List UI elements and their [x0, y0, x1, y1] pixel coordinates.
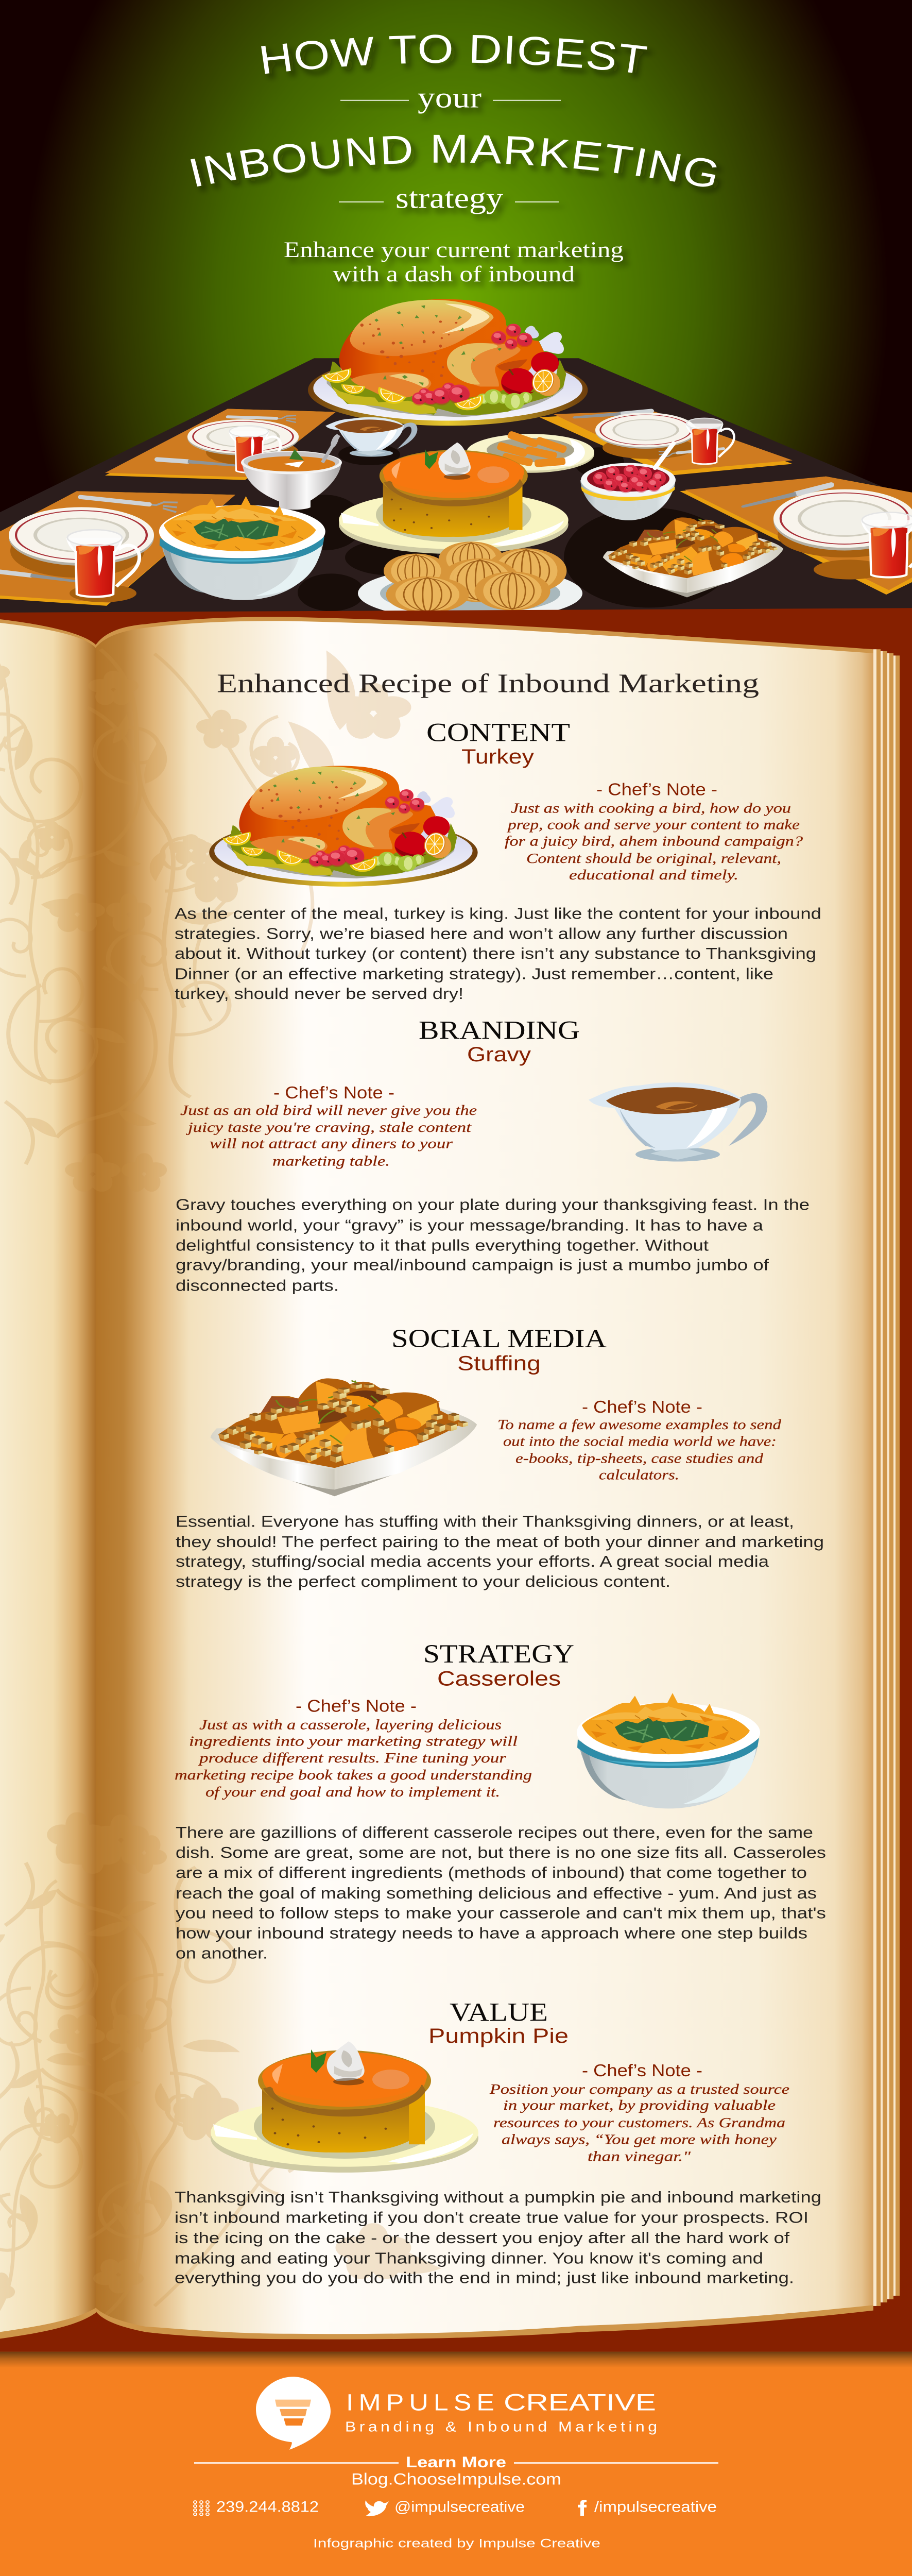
- icon: gravy boat: [589, 1082, 767, 1161]
- body text: you need to follow steps to make your casserole and can't mix them up, that's: [176, 1904, 826, 1922]
- chef's note: - Chef’s Note -: [596, 780, 717, 799]
- icon: turkey: [209, 766, 478, 887]
- heading: inbound marketing: INBOUND MARKETING: [191, 135, 722, 194]
- logo wordmark: [346, 2390, 656, 2416]
- chef's note: marketing recipe book takes a good understanding: [175, 1767, 532, 1783]
- body text: turkey, should never be served dry!: [175, 985, 463, 1002]
- placemat bottom left: [0, 491, 235, 606]
- table top: [0, 358, 912, 627]
- subtitle line 2: with a dash of inbound: [333, 262, 575, 286]
- subheading: Turkey: [461, 745, 534, 768]
- section: content: [175, 718, 821, 1002]
- chef's note: [175, 1697, 532, 1800]
- header background: [0, 0, 912, 627]
- chef's note: of your end goal and how to implement it.: [205, 1784, 500, 1800]
- cranberry cup: [580, 443, 676, 520]
- body text: Gravy touches everything on your plate during your thanksgiving feast. In the: [176, 1196, 810, 1213]
- body text: [176, 1823, 826, 1962]
- credit line: Infographic created by Impulse Creative: [313, 2536, 600, 2550]
- subheading: Gravy: [467, 1043, 531, 1066]
- icon: facebook: [578, 2500, 587, 2516]
- table: [0, 299, 912, 627]
- subheading: Stuffing: [457, 1352, 541, 1375]
- chef's note: [489, 2061, 789, 2164]
- footer: [0, 2352, 912, 2576]
- chef's note: produce different results. Fine tuning your: [198, 1750, 506, 1766]
- turkey platter: [308, 299, 588, 426]
- pumpkin pie: [339, 443, 569, 554]
- body text: strategy is the perfect compliment to your delicious content.: [176, 1572, 670, 1590]
- icon: pumpkin pie: [211, 2041, 478, 2173]
- chef's note: - Chef’s Note -: [582, 2061, 702, 2080]
- carrot plate: [467, 431, 594, 473]
- cutlery bottom right: [741, 483, 832, 510]
- heading: VALUE: [450, 1997, 548, 2026]
- footer shadow: [0, 2352, 912, 2368]
- body text: dish. Some are great, some are not, but there is no one size fits all. Casseroles: [176, 1843, 826, 1861]
- chef's note: ingredients into your marketing strategy will: [189, 1734, 518, 1749]
- plate top right: [595, 413, 696, 449]
- chef's note: Just as an old bird will never give you the: [180, 1103, 477, 1118]
- chef's note: than vinegar.": [588, 2148, 691, 2164]
- logo wordmark: IMPULSE: [346, 2390, 494, 2416]
- icon: phone keypad: [194, 2501, 209, 2516]
- plate bottom right: [773, 489, 912, 550]
- plate bottom left: [9, 507, 154, 566]
- glass top right: [686, 418, 734, 464]
- chef's note: for a juicy bird, ahem inbound campaign?: [505, 834, 803, 849]
- body text: they should! The perfect pairing to the meat of both your dinner and marketing: [176, 1533, 824, 1550]
- chef's note: prep, cook and serve your content to make: [507, 817, 800, 833]
- chef's note: [180, 1083, 477, 1169]
- body text: inbound world, your “gravy” is your message/branding. It has to have a: [176, 1216, 764, 1234]
- chef's note: - Chef’s Note -: [296, 1697, 417, 1716]
- right page: [96, 621, 873, 2334]
- soup cup: [241, 433, 342, 510]
- heading: BRANDING: [419, 1015, 580, 1044]
- chef's note: To name a few awesome examples to send: [497, 1417, 782, 1433]
- body text: is the icing on the cake - or the dessert you enjoy after all the hard work of: [175, 2229, 790, 2247]
- chef's note: educational and timely.: [569, 867, 738, 883]
- chef's note: Position your company as a trusted source: [489, 2081, 789, 2097]
- body text: [176, 1196, 810, 1294]
- heading: how to digest: HOW TO DIGEST: [261, 35, 652, 80]
- plate top left: [187, 419, 299, 455]
- glass top left: [230, 426, 281, 473]
- page stack: [873, 649, 900, 2306]
- placemat top left: [105, 409, 336, 480]
- cutlery top right: [573, 409, 724, 458]
- subheading: Pumpkin Pie: [428, 2025, 569, 2047]
- heading: STRATEGY: [423, 1639, 574, 1668]
- chef's note: e-books, tip-sheets, case studies and: [515, 1450, 764, 1466]
- logo tagline: Branding & Inbound Marketing: [345, 2419, 657, 2435]
- body text: isn’t inbound marketing if you don't create true value for your prospects. ROI: [175, 2208, 808, 2226]
- logo mark: [256, 2377, 331, 2450]
- body text: strategies. Sorry, we’re biased here and won’t allow any further discussion: [175, 925, 788, 942]
- heading: SOCIAL MEDIA: [391, 1324, 607, 1353]
- subtitle line 1: Enhance your current marketing: [284, 238, 624, 262]
- book cover: [0, 608, 912, 2352]
- section: value: [175, 1997, 821, 2286]
- chef's note: in your market, by providing valuable: [503, 2097, 776, 2113]
- heading: your: your: [418, 81, 481, 114]
- chef's note: [497, 1397, 782, 1483]
- section: strategy: [175, 1639, 826, 1962]
- body text: Dinner (or an effective marketing strategy). Just remember…content, like: [175, 965, 773, 982]
- gravy boat: [325, 417, 417, 456]
- title: [191, 35, 722, 289]
- body text: [175, 905, 821, 1002]
- footer background: [0, 2352, 912, 2576]
- place setting shadows: [10, 436, 911, 602]
- learn more: Learn More: [406, 2453, 506, 2470]
- left page: [0, 623, 96, 2332]
- page title: Enhanced Recipe of Inbound Marketing: [217, 669, 759, 699]
- body text: how your inbound strategy needs to have a approach where one step builds: [176, 1924, 807, 1942]
- chef's note: calculators.: [599, 1467, 679, 1483]
- icon: stuffing bowl: [211, 1378, 477, 1496]
- chef's note: Just as with a casserole, layering delicious: [199, 1717, 502, 1733]
- subheading: Casseroles: [437, 1667, 561, 1690]
- body text: There are gazillions of different casserole recipes out there, even for the same: [176, 1823, 813, 1841]
- chef's note: juicy taste you're craving, stale content: [185, 1120, 472, 1136]
- body text: Thanksgiving isn’t Thanksgiving without a pumpkin pie and inbound marketing: [175, 2188, 821, 2206]
- body text: gravy/branding, your meal/inbound campaign is just a mumbo jumbo of: [176, 1256, 769, 1274]
- body text: [175, 2188, 821, 2286]
- left page edge: [0, 619, 96, 2338]
- stuffing bowl: [603, 517, 783, 598]
- cutlery bottom left: [0, 492, 178, 583]
- chef's note: always says, “You get more with honey: [502, 2131, 777, 2147]
- right page edge: [96, 617, 873, 2340]
- body text: making and eating your Thanksgiving dinner. You know it's coming and: [175, 2249, 763, 2267]
- logo wordmark: CREATIVE: [504, 2390, 656, 2416]
- chef's note: marketing table.: [272, 1153, 390, 1169]
- section: branding: [176, 1015, 810, 1294]
- casserole bowl: [159, 496, 325, 600]
- body text: As the center of the meal, turkey is king. Just like the content for your inbound: [175, 905, 821, 922]
- icon: casserole bowl: [577, 1693, 760, 1808]
- body text: delightful consistency to it that pulls everything together. Without: [176, 1236, 709, 1254]
- chef's note: will not attract any diners to your: [210, 1136, 453, 1151]
- blog url: Blog.ChooseImpulse.com: [351, 2470, 561, 2488]
- icon: twitter: [365, 2500, 389, 2516]
- glass bottom right: [862, 512, 912, 578]
- body text: on another.: [176, 1944, 268, 1962]
- body text: are a mix of different ingredients (methods of inbound) that come together to: [176, 1863, 807, 1882]
- body text: reach the goal of making something delicious and effective - yum. And just as: [176, 1884, 817, 1902]
- phone number: 239.244.8812: [216, 2498, 319, 2515]
- chef's note: [505, 780, 803, 883]
- placemat top right: [540, 411, 793, 476]
- glass bottom left: [67, 530, 140, 597]
- body text: about it. Without turkey (or content) there isn’t any substance to Thanksgiving: [175, 944, 816, 962]
- section: social media: [176, 1324, 824, 1590]
- body text: everything you do you do with the end in mind; just like inbound marketing.: [175, 2269, 794, 2286]
- chef's note: Content should be original, relevant,: [526, 851, 781, 866]
- heading: strategy: strategy: [395, 182, 503, 214]
- body text: strategy, stuffing/social media accents your efforts. A great social media: [176, 1552, 769, 1570]
- chef's note: - Chef’s Note -: [582, 1397, 702, 1416]
- body text: Essential. Everyone has stuffing with their Thanksgiving dinners, or at least,: [176, 1513, 794, 1530]
- chef's note: resources to your customers. As Grandma: [493, 2115, 785, 2131]
- table shadows: [286, 444, 734, 611]
- chef's note: - Chef’s Note -: [273, 1083, 394, 1102]
- bread plate: [358, 541, 582, 620]
- placemat bottom right: [680, 477, 912, 595]
- chef's note: out into the social media world we have:: [503, 1433, 777, 1449]
- body text: disconnected parts.: [176, 1277, 339, 1294]
- body text: [176, 1513, 824, 1590]
- twitter handle: @impulsecreative: [394, 2498, 525, 2515]
- facebook handle: /impulsecreative: [594, 2498, 717, 2515]
- floral page pattern: [0, 636, 441, 2328]
- chef's note: Just as with cooking a bird, how do you: [511, 800, 791, 816]
- cutlery top left: [157, 414, 296, 467]
- heading: CONTENT: [426, 718, 570, 747]
